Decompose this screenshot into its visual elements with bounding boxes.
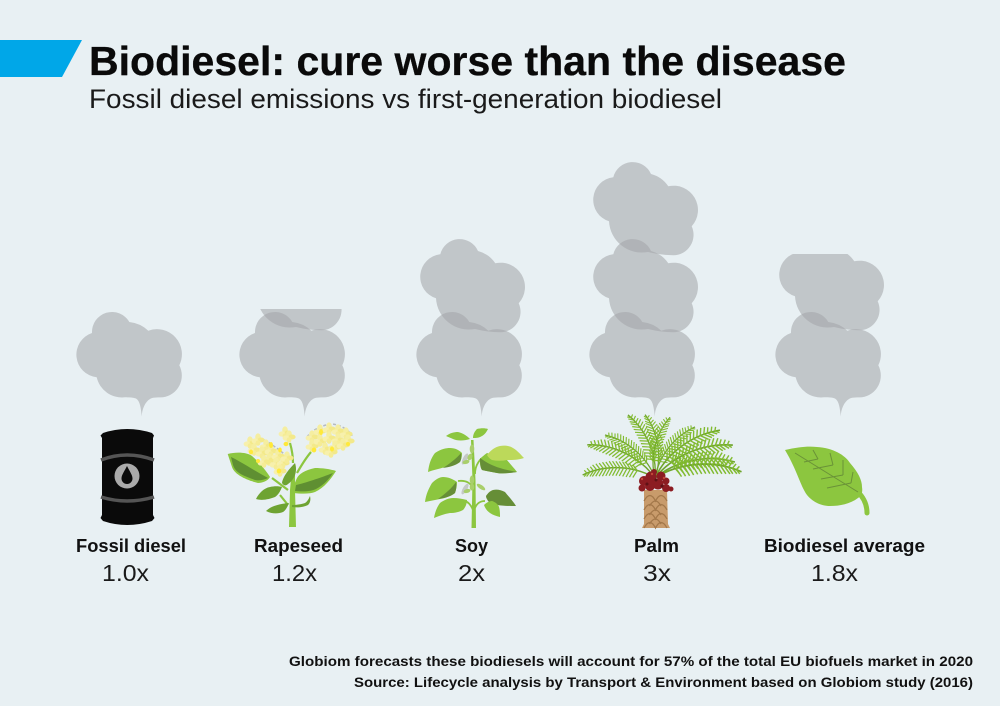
label: fossil diesel: 1.0x xyxy=(102,560,150,586)
label: biodiesel average: Biodiesel average xyxy=(764,536,925,556)
smoke: fossil diesel xyxy=(76,312,182,416)
label: palm xyxy=(634,536,679,586)
subtitle: Fossil diesel emissions vs first-generation biodiesel xyxy=(89,84,722,114)
footnote xyxy=(289,654,973,690)
icon: soy plant xyxy=(425,428,524,528)
label: fossil diesel: Fossil diesel xyxy=(76,536,186,556)
title: Biodiesel: cure worse than the disease xyxy=(89,38,846,84)
smoke: rapeseed xyxy=(239,309,345,416)
smoke: biodiesel average xyxy=(775,237,884,416)
label: soy: 2x xyxy=(458,560,486,586)
label: fossil diesel xyxy=(76,536,186,586)
blue title tab xyxy=(0,40,82,77)
footnote: Globiom forecasts these biodiesels will account for 57% of the total EU biofuels market in 2020 xyxy=(289,654,973,669)
label: soy xyxy=(455,536,488,586)
icon: palm tree xyxy=(582,409,742,528)
icon: leaf xyxy=(785,447,867,513)
label: rapeseed: Rapeseed xyxy=(254,536,343,556)
label: palm: Palm xyxy=(634,536,679,556)
footnote: Source: Lifecycle analysis by Transport & Environment based on Globiom study (2016) xyxy=(354,675,973,690)
smoke: palm xyxy=(589,162,698,416)
label: palm: 3x xyxy=(643,560,672,586)
label: biodiesel average: 1.8x xyxy=(811,560,859,586)
icon: oil barrel xyxy=(100,429,154,525)
label: biodiesel average xyxy=(764,536,925,586)
smoke: soy xyxy=(416,239,525,416)
icon: rapeseed plant xyxy=(228,422,355,527)
label: rapeseed xyxy=(254,536,343,586)
label: rapeseed: 1.2x xyxy=(272,560,318,586)
label: soy: Soy xyxy=(455,536,488,556)
